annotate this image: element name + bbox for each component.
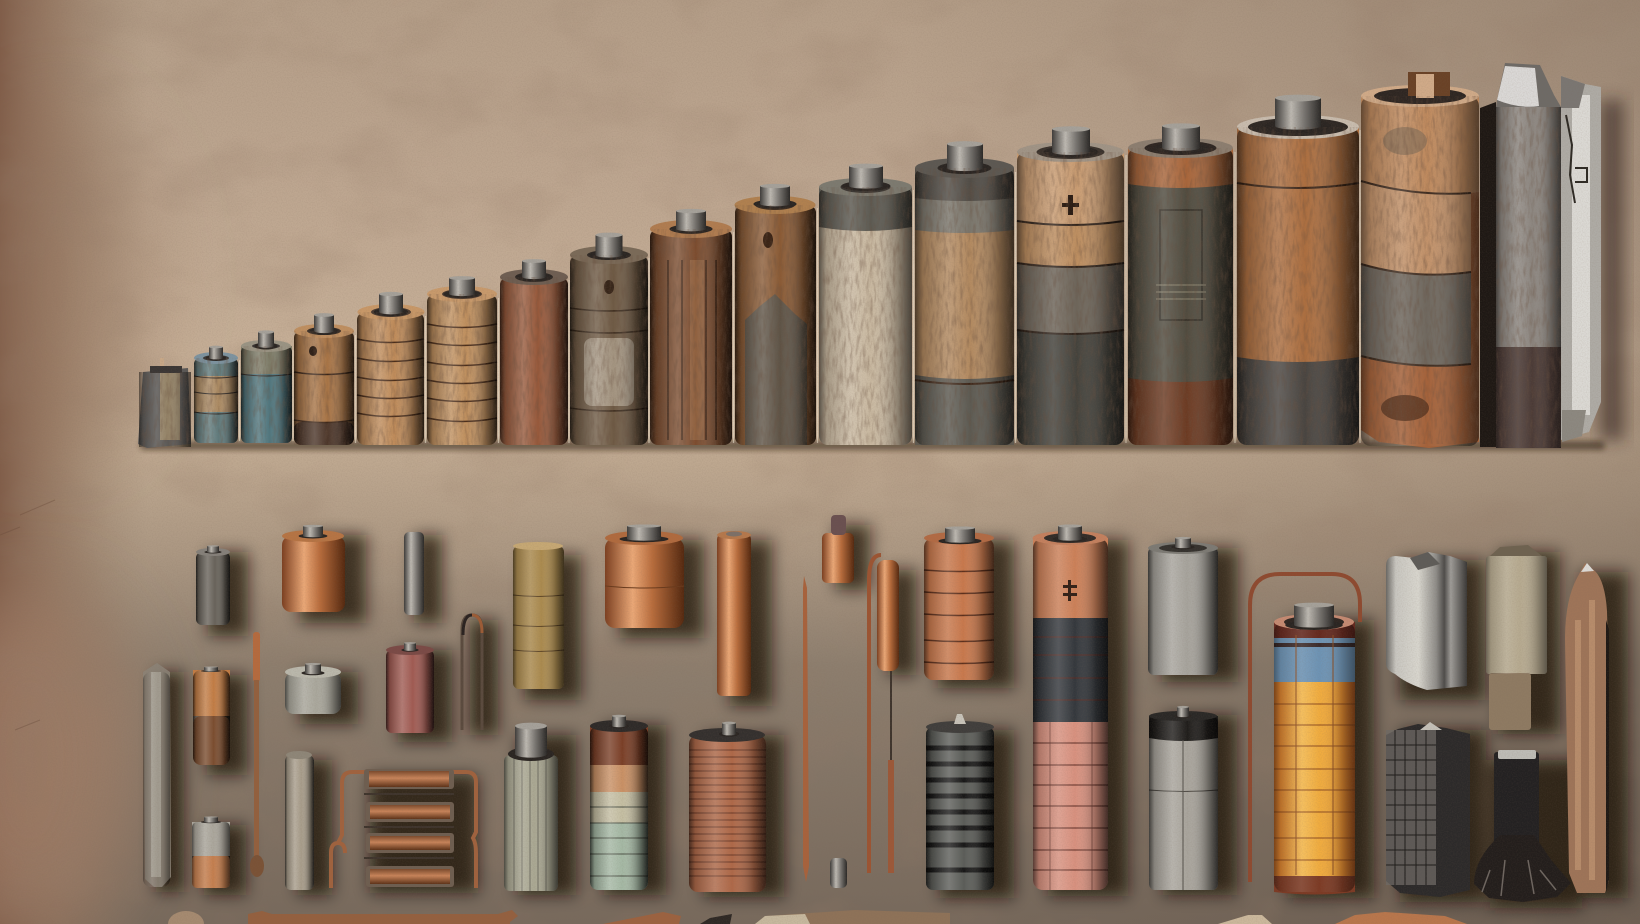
- bottom array of parts: [143, 515, 1609, 924]
- part: cut-off copper cap: [1335, 912, 1467, 924]
- battery 10: rust and bark cell: [734, 184, 816, 445]
- battery 13: four-band cell: [1017, 126, 1124, 445]
- battery 9: rusty fluted cell: [650, 209, 732, 445]
- part: copper cell: [282, 525, 345, 612]
- part: wood textured pencil: [1565, 563, 1609, 893]
- part: ribbed gray cell: [504, 723, 558, 891]
- part: crimson cell: [386, 642, 434, 733]
- part: layered teal cell: [590, 715, 648, 890]
- battery 18: white foil wrap: [1561, 76, 1601, 442]
- part: tall tri-colour cell: [1032, 524, 1108, 890]
- part: short silver cell: [285, 663, 341, 714]
- part: dark ribbed cell: [926, 714, 994, 890]
- part: copper dipper rod: [250, 632, 264, 877]
- part: black brush cell: [1474, 750, 1571, 902]
- top row: growing batteries: [130, 63, 1601, 455]
- part: copper hanger wire: [1250, 574, 1360, 882]
- part: banded copper cell: [924, 526, 994, 680]
- part: copper half cell: [193, 667, 230, 765]
- battery 14: engraved dark cell: [1128, 123, 1233, 445]
- part: wide copper cell: [605, 524, 684, 628]
- battery 4: copper cell: [294, 313, 354, 445]
- part: cut-off cream cylinder: [700, 910, 950, 924]
- part: dark mesh pack: [1386, 722, 1470, 897]
- battery 1: small gray pack: [138, 358, 191, 448]
- part: cream and brown stick: [1486, 545, 1547, 730]
- battery 11: cream cell with dark cap: [819, 164, 912, 445]
- part: small copper vial: [822, 515, 854, 583]
- part: cut-off cream tip: [1218, 915, 1272, 924]
- battery 6: banded copper cell: [427, 276, 497, 445]
- part: copper needle: [803, 576, 809, 882]
- cast shadows of bottom parts: [156, 525, 1628, 908]
- battery 15: large copper cell: [1237, 95, 1359, 445]
- part: silver cell: [1148, 537, 1218, 675]
- battery 7: red copper cell: [500, 259, 568, 445]
- pale edge highlights between cells: [240, 130, 1360, 443]
- part: cut-off copper end: [603, 912, 681, 924]
- part: cut-off disc at bottom left: [168, 911, 204, 924]
- battery 16: copper, gray and rust cell: [1361, 72, 1479, 448]
- battery 17: gray foil pack: [1480, 63, 1561, 448]
- battery 3: teal cell: [241, 330, 292, 443]
- shade right of last cell: [1600, 100, 1624, 440]
- part: small silver copper cell: [192, 816, 230, 888]
- battery 5: banded copper cell: [357, 292, 424, 445]
- part: silver cell with black cap: [1149, 706, 1218, 890]
- battery 8: panelled bronze cell: [570, 233, 648, 445]
- part: silver rod: [285, 751, 314, 890]
- part: glass tube: [143, 663, 171, 887]
- battery 12: rusted tan cell: [915, 141, 1014, 445]
- part: ribbed copper cell: [689, 722, 766, 892]
- part: small steel plug: [830, 858, 847, 888]
- part: hairpin wire: [462, 615, 482, 730]
- rust texture over top-row cells: [130, 90, 1570, 455]
- part: dark slim cell: [196, 545, 230, 625]
- part: thin gray rod: [404, 532, 424, 615]
- part: coil frame: [331, 769, 476, 888]
- part: cut-off copper rod at bottom: [248, 910, 518, 924]
- part: brass cell: [513, 542, 564, 689]
- part: copper tube with hooked wire: [869, 555, 899, 873]
- shelf contact shadow under top row: [140, 441, 1605, 450]
- battery 2: teal and tan cell: [194, 346, 238, 443]
- part: tall copper tube: [717, 531, 751, 696]
- part: silver prism pack: [1386, 552, 1467, 690]
- part: amber and blue cell: [1274, 603, 1355, 894]
